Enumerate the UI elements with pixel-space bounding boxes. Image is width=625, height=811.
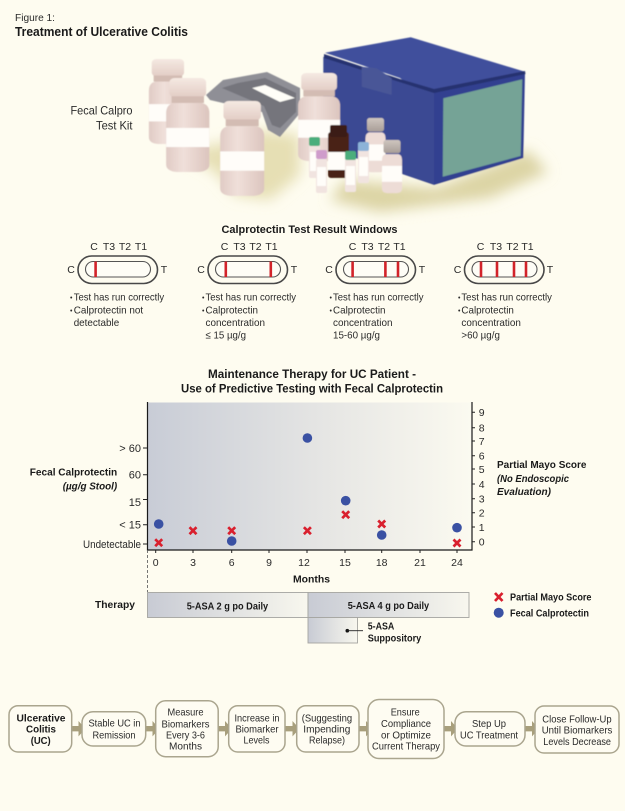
therapy bar: 2 g xyxy=(148,592,308,618)
partial Mayo score points xyxy=(155,511,460,546)
flow step: stable UC xyxy=(82,712,146,746)
x axis labels: 9 xyxy=(266,557,272,569)
chart title: Use of Predictive Testing with Fecal Calprotectin xyxy=(181,384,443,396)
flow step: close follow-up: Until Biomarkers xyxy=(542,724,612,736)
flow step: increase in biomarkers: Increase in xyxy=(234,712,280,724)
chart title xyxy=(181,369,443,396)
title: Treatment of Ulcerative Colitis xyxy=(15,24,188,39)
panel: result window 1: detectable xyxy=(74,317,119,329)
x axis labels: 18 xyxy=(376,557,388,569)
illustration: test kit xyxy=(149,37,548,212)
therapy bar: suppository: 5-ASA xyxy=(368,622,394,632)
right axis labels: 3 xyxy=(479,494,485,506)
figure number: Figure 1: xyxy=(15,12,55,24)
flow step: ensure compliance xyxy=(368,700,444,758)
flow step: suggesting relapse xyxy=(297,706,359,752)
panel: result window 3: T3 xyxy=(361,241,374,253)
y axis title: partial Mayo score: (No Endoscopic xyxy=(497,473,569,485)
x axis labels: 6 xyxy=(229,557,235,569)
x axis labels: 0 xyxy=(153,557,159,569)
flow step: suggesting relapse: Relapse) xyxy=(309,735,345,747)
left axis labels xyxy=(83,443,141,551)
panel: result window 2: C xyxy=(221,241,229,253)
panel: result window 4: T1 xyxy=(521,241,534,253)
right axis labels: 8 xyxy=(479,422,485,434)
panel: result window 3: • xyxy=(330,308,332,315)
therapy bar: 4 g xyxy=(308,592,469,618)
right axis labels: 7 xyxy=(479,436,485,448)
flow step: ulcerative colitis: (UC) xyxy=(31,735,51,747)
panel: result window 1: C xyxy=(67,264,75,276)
right axis labels xyxy=(479,407,485,548)
flow step: ensure compliance: Compliance xyxy=(381,718,431,730)
panel: result window 1: T2 xyxy=(119,241,131,253)
right axis labels: 1 xyxy=(479,522,485,534)
panel: result window 4: T xyxy=(547,264,554,276)
therapy bar: 2 g: 5-ASA 2 g po Daily xyxy=(187,602,269,612)
left axis labels: < 15 xyxy=(119,520,141,532)
flow step: measure biomarkers: Months xyxy=(169,740,202,752)
therapy bar: suppository xyxy=(308,618,422,644)
panel: result window 4 xyxy=(454,241,554,342)
flow step: stable UC: Remission xyxy=(92,729,136,741)
x axis labels: 21 xyxy=(414,557,426,569)
panel: result window 1: Calprotectin not xyxy=(74,304,143,316)
panel: result window 4: T2 xyxy=(506,241,519,253)
flow step: close follow-up: Levels Decrease xyxy=(543,736,611,748)
panel: result window 3: • xyxy=(330,295,332,302)
panel: result window 2: T xyxy=(291,264,298,276)
flow step: measure biomarkers xyxy=(156,701,218,757)
flow step: ulcerative colitis xyxy=(9,706,72,752)
right axis labels: 2 xyxy=(479,508,485,520)
right axis labels: 0 xyxy=(479,536,485,548)
chart title: Maintenance Therapy for UC Patient - xyxy=(208,369,416,381)
flow step: ensure compliance: Ensure xyxy=(391,707,420,719)
panel: result window 2: Test has run correctly xyxy=(206,292,297,304)
y axis title: fecal calprotectin: (µg/g Stool) xyxy=(63,480,118,492)
panel: result window 1: T1 xyxy=(135,241,147,253)
flow step: suggesting relapse: (Suggesting xyxy=(302,712,352,724)
x axis labels: 12 xyxy=(298,557,310,569)
label: fecal calpro test kit: Test Kit xyxy=(96,118,133,132)
panel: result window 3 xyxy=(325,241,426,342)
heading: test result windows: Calprotectin Test Result Windows xyxy=(222,224,398,236)
panel: result window 1: • xyxy=(70,308,73,315)
right axis labels: 6 xyxy=(479,450,485,462)
label: fecal calpro test kit xyxy=(70,104,133,132)
panel: result window 3: Calprotectin xyxy=(333,304,386,316)
flow step: step up treatment: Step Up xyxy=(472,718,506,730)
flow step: ulcerative colitis: Colitis xyxy=(26,723,56,735)
panel: result window 3: 15-60 µg/g xyxy=(333,330,380,342)
panel: result window 4: • xyxy=(458,295,461,302)
left axis labels: 60 xyxy=(129,470,141,482)
x axis labels: 15 xyxy=(339,557,351,569)
right axis labels: 5 xyxy=(479,464,485,476)
panel: result window 2: • xyxy=(202,308,205,315)
left axis labels: 15 xyxy=(129,497,141,509)
flow step: step up treatment xyxy=(455,712,525,746)
flow step: step up treatment: UC Treatment xyxy=(460,729,518,741)
panel: result window 2: ≤ 15 µg/g xyxy=(206,330,246,342)
flow step: ensure compliance: Current Therapy xyxy=(372,741,441,753)
fecal calprotectin points xyxy=(154,433,462,546)
y axis title: fecal calprotectin: Fecal Calprotectin xyxy=(30,466,117,478)
flow step: measure biomarkers: Biomarkers xyxy=(162,718,210,730)
panel: result window 3: T xyxy=(419,264,426,276)
flow step: close follow-up xyxy=(535,706,619,753)
therapy bar: 4 g: 5-ASA 4 g po Daily xyxy=(348,601,430,612)
panel: result window 3: Test has run correctly xyxy=(333,292,424,304)
panel: result window 2: • xyxy=(202,295,205,302)
chart: calprotectin and Mayo score over months xyxy=(83,402,485,592)
x axis labels: 24 xyxy=(451,557,463,569)
x axis title: Months xyxy=(293,574,330,586)
panel: result window 4: C xyxy=(454,264,462,276)
y axis title: fecal calprotectin xyxy=(30,466,118,492)
flow step: increase in biomarkers: Levels xyxy=(244,735,270,747)
panel: result window 1: C xyxy=(90,241,98,253)
panel: result window 2 xyxy=(197,241,298,342)
panel: result window 2: T1 xyxy=(265,241,278,253)
x axis labels xyxy=(153,557,463,569)
panel: result window 3: concentration xyxy=(333,317,393,329)
right axis labels: 9 xyxy=(479,407,485,419)
label: fecal calpro test kit: Fecal Calpro xyxy=(70,104,133,118)
panel: result window 4: Test has run correctly xyxy=(461,292,553,304)
panel: result window 1: T xyxy=(161,264,168,276)
panel: result window 2: T3 xyxy=(233,241,246,253)
flow step: close follow-up: Close Follow-Up xyxy=(542,714,612,726)
left axis labels: Undetectable xyxy=(83,539,141,551)
left axis labels: > 60 xyxy=(119,443,141,455)
legend xyxy=(494,592,592,620)
y axis title: partial Mayo score: Evaluation) xyxy=(497,486,551,498)
flow step: measure biomarkers: Every 3-6 xyxy=(166,729,205,741)
flow step: stable UC: Stable UC in xyxy=(88,718,141,730)
panel: result window 3: T1 xyxy=(393,241,406,253)
panel: result window 2: concentration xyxy=(206,317,265,329)
flow step: measure biomarkers: Measure xyxy=(168,707,204,719)
panel: result window 4: • xyxy=(458,308,461,315)
therapy bar: suppository: Suppository xyxy=(368,633,422,644)
flow step: ulcerative colitis: Ulcerative xyxy=(16,712,66,724)
y axis title: partial Mayo score: Partial Mayo Score xyxy=(497,459,587,471)
flow arrows xyxy=(72,721,539,736)
panel: result window 1: Test has run correctly xyxy=(74,292,165,304)
panel: result window 2: C xyxy=(197,264,205,276)
legend: Fecal Calprotectin xyxy=(510,608,589,620)
flow step: suggesting relapse: Impending xyxy=(303,724,350,736)
panel: result window 4: concentration xyxy=(461,317,521,329)
panel: result window 3: T2 xyxy=(378,241,390,253)
panel: result window 1: T3 xyxy=(103,241,115,253)
panel: result window 2: Calprotectin xyxy=(206,304,258,316)
right axis labels: 4 xyxy=(479,479,485,491)
panel: result window 2: T2 xyxy=(249,241,262,253)
panel: result window 4: >60 µg/g xyxy=(461,330,500,342)
therapy label: Therapy xyxy=(95,599,135,611)
panel: result window 4: C xyxy=(477,241,485,253)
legend: Partial Mayo Score xyxy=(510,592,592,604)
panel: result window 3: C xyxy=(349,241,357,253)
panel: result window 3: C xyxy=(325,264,333,276)
panel: result window 4: T3 xyxy=(490,241,502,253)
y axis title: partial Mayo score xyxy=(497,459,587,498)
flow step: increase in biomarkers: Biomarker xyxy=(236,723,279,735)
flow step: ensure compliance: or Optimize xyxy=(381,729,431,741)
panel: result window 1 xyxy=(67,241,168,329)
panel: result window 4: Calprotectin xyxy=(461,304,514,316)
flow step: increase in biomarkers xyxy=(229,706,285,752)
x axis labels: 3 xyxy=(190,557,196,569)
panel: result window 1: • xyxy=(70,295,73,302)
